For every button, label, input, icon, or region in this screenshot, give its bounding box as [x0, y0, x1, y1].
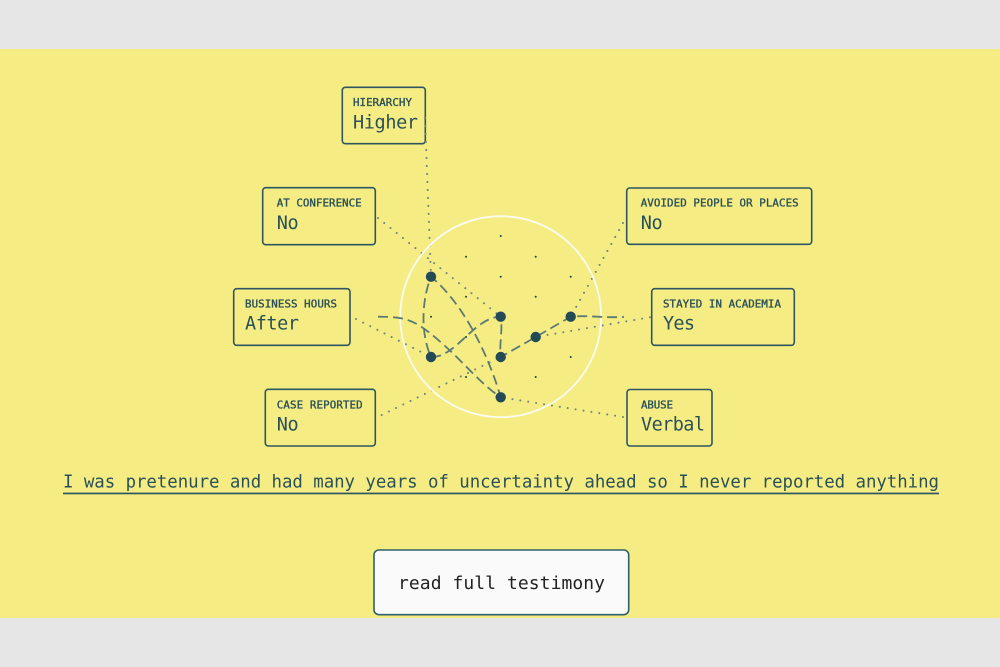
- card: business hours: BUSINESS HOURS: [245, 298, 337, 310]
- quote: I was pretenure and had many years of uncertainty ahead so I never reported anything: [63, 472, 939, 492]
- white circle: [400, 216, 601, 417]
- card: stayed in academia: [652, 289, 794, 345]
- card: case reported: No: [277, 414, 299, 436]
- dashed route: [378, 277, 624, 397]
- card: hierarchy: [342, 87, 425, 144]
- card: abuse: Verbal: [641, 414, 705, 436]
- card: case reported: [265, 389, 375, 446]
- button: read full testimony: [374, 550, 629, 615]
- card: at conference: No: [277, 213, 299, 234]
- card: avoided people or places: No: [641, 213, 663, 234]
- card: abuse: ABUSE: [641, 398, 673, 412]
- button: read full testimony: read full testimony: [398, 573, 605, 594]
- nodes: [426, 272, 576, 402]
- card: case reported: CASE REPORTED: [277, 398, 363, 412]
- card: avoided people or places: AVOIDED PEOPLE OR PLACES: [641, 196, 799, 210]
- card: avoided people or places: [627, 188, 812, 244]
- card: at conference: AT CONFERENCE: [277, 196, 362, 210]
- card: at conference: [263, 188, 375, 245]
- card: hierarchy: Higher: [353, 112, 418, 133]
- card: business hours: After: [245, 314, 299, 334]
- grid dots: [430, 235, 572, 378]
- dotted connectors: [356, 118, 650, 417]
- card: business hours: [234, 289, 350, 345]
- card: abuse: [627, 390, 712, 446]
- card: stayed in academia: Yes: [663, 314, 695, 334]
- card: hierarchy: HIERARCHY: [353, 96, 412, 109]
- card: stayed in academia: STAYED IN ACADEMIA: [663, 298, 781, 310]
